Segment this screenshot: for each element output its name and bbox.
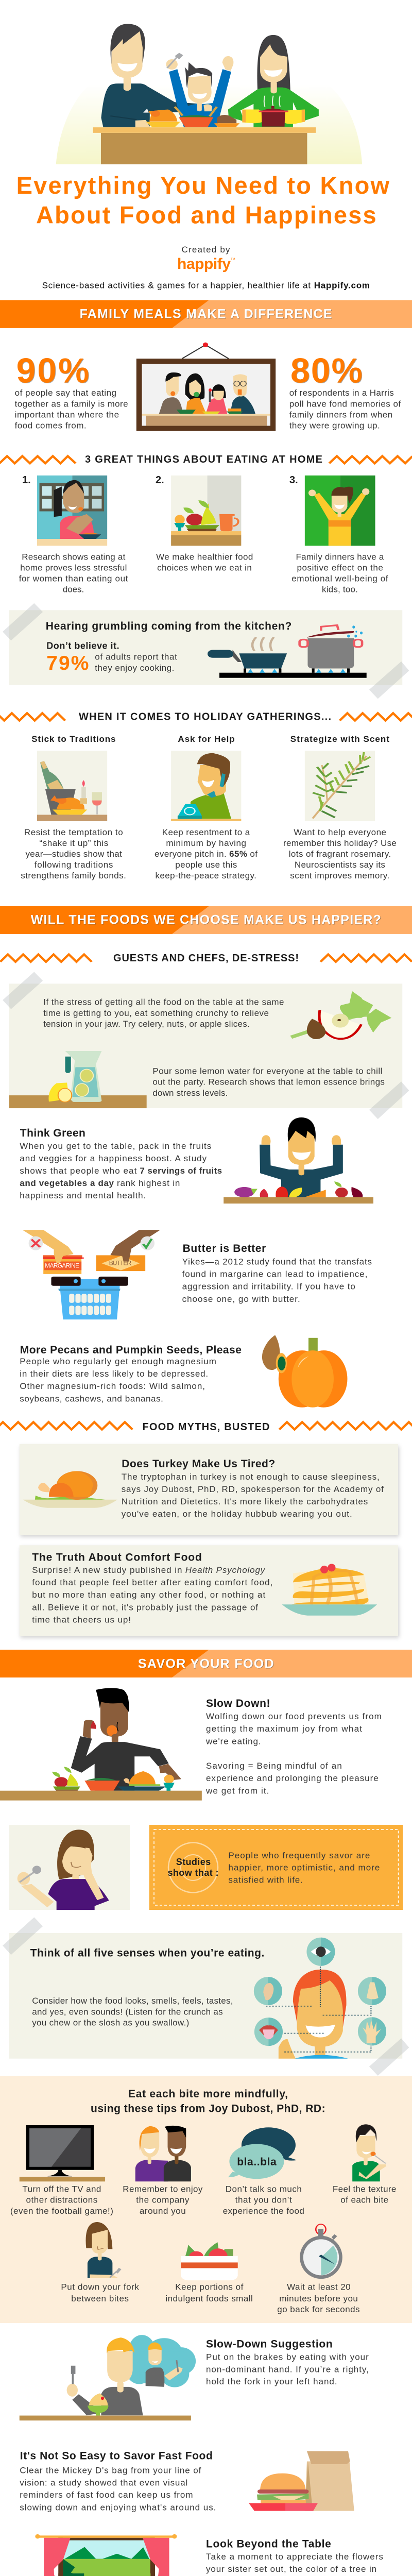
food on table [143,107,239,127]
column: stick to traditions: year—studies show that [26,849,122,859]
tip: feel the texture: of each bite [340,2195,388,2205]
tip: enjoy company: around you [140,2206,186,2216]
illustration: choosing butter over margarine [22,1230,160,1319]
icon: rosemary [305,751,375,821]
column: strategize with scent: Want to help everyone [294,827,386,837]
tagline: Happify.com [314,280,370,291]
block: fast food [20,2450,216,2512]
panel: studies show that: People who frequently savor are [228,1851,370,1860]
hero illustration: family at table [56,24,362,164]
heading: 3 great things [0,454,412,465]
block: fast food: vision: a study showed that even visual [20,2478,187,2487]
block: butter is better: Butter is Better [183,1243,266,1255]
heading: 3 great things: 3 GREAT THINGS ABOUT EATING AT HOME [85,454,322,465]
panel: de-stress tips: If the stress of getting all the food on the table at the same [43,997,284,1007]
panel: mindful eating tips [0,2076,412,2323]
heading: food myths [0,1421,412,1433]
block: think green: shows that people who eat [20,1166,137,1176]
column: strategize with scent [283,734,397,880]
stat: 80%: they were growing up. [289,420,380,430]
column: strategize with scent: scent improves memory. [290,871,389,880]
callout: grumbling in the kitchen: Hearing grumbling coming from the kitchen? [46,620,291,632]
block: look beyond the table [206,2538,383,2576]
heading: food myths: FOOD MYTHS, BUSTED [142,1421,270,1433]
block: fast food: Clear the Mickey D's bag from your line of [20,2465,201,2475]
card: truth about comfort food: time that cheers us up! [32,1615,131,1624]
icon: roast turkey [23,1471,117,1508]
card: truth about comfort food: The Truth About Comfort Food [32,1551,202,1563]
icon: celery, apple and nut [291,991,391,1039]
tip: wait 20 minutes: Wait at least 20 [287,2282,351,2292]
panel: de-stress tips: tension in your jaw. Try celery, nuts, or apple slices. [43,1019,250,1029]
block: pecans and pumpkin seeds: soybeans, cashews, and bananas. [20,1394,163,1403]
item captions: We make healthier food [156,552,253,562]
heading: guests and chefs [1,953,412,964]
illustration: man with fruits and vegetables [224,1117,373,1204]
item captions: emotional well-being of [291,574,388,584]
column: stick to traditions [21,734,126,880]
item 3: number and picture of happy girl [289,474,375,546]
illustration: man eating at table [0,1688,202,1801]
icon: pancake stack [282,1564,377,1616]
item 3: number and picture of happy girl: 3. [289,474,298,486]
boy with fork [166,53,233,127]
panel: mindful eating tips: using these tips from Joy Dubost, PhD, RD: [91,2103,325,2114]
tip: wait 20 minutes [277,2224,359,2314]
block: slow down: Savoring = Being mindful of an [206,1761,342,1771]
tip: put down fork: between bites [71,2294,129,2303]
framed family picture [136,343,276,431]
item 1: number and picture of woman eating [22,474,107,546]
illustration: window sill with vase and fruit [44,2573,169,2576]
block: think green: rank highest in [117,1178,180,1188]
block: think green: 7 servings of fruits [140,1166,222,1176]
column: ask for help: Ask for Help [178,734,235,744]
tip: put down fork [61,2222,139,2303]
stat: 80% [289,351,401,430]
title: Everything You Need to Know [16,172,390,199]
item captions: Research shows eating at [22,552,126,562]
card: truth about comfort food: all. Believe it or not, it's probably just the passage of [32,1602,258,1612]
panel: de-stress tips: time is getting to you, eat something crunchy to relieve [43,1008,269,1018]
tip: don't talk so much: Don’t talk so much [226,2184,302,2194]
illustration: choosing butter over margarine: MARGARINE [45,1262,79,1269]
block: think green: When you get to the table, pack in the fruits [20,1141,211,1151]
column: ask for help [154,734,258,880]
tip: turn off tv [10,2125,113,2216]
card: does turkey make us tired [20,1444,398,1535]
heading: holiday gatherings: WHEN IT COMES TO HOLIDAY GATHERINGS... [79,711,331,722]
block: slow down: experience and prolonging the pleasure [206,1773,379,1783]
panel: studies show that: happier, more optimistic, and more [228,1863,380,1873]
illustration: pumpkin and pecan [262,1335,347,1408]
block: slow down: getting the maximum joy from what [206,1724,362,1734]
block: slow-down suggestion: non-dominant hand. If you’re a righty, [206,2364,369,2374]
block: slow-down suggestion: Put on the brakes by eating with your [206,2352,369,2362]
card: does turkey make us tired: Does Turkey Make Us Tired? [122,1458,275,1470]
illustration: slow-down suggestion man [20,2335,196,2420]
icon: woman on the phone [171,751,241,821]
icon: pan and pot on stove [208,625,367,678]
column: strategize with scent: Neuroscientists say its [295,860,385,870]
tip: turn off tv: Turn off the TV and [22,2184,101,2194]
item captions: does. [63,585,84,595]
panel: five senses: you chew or the slosh as you swallow.) [32,2018,189,2027]
item captions: positive effect on the [297,563,383,573]
created by: Created by [181,245,230,255]
tip: keep portions small: Keep portions of [175,2282,244,2292]
woman with pot [228,35,319,127]
block: think green: happiness and mental health. [20,1191,146,1200]
section banner: savor your food: SAVOR YOUR FOOD [138,1657,274,1671]
column: ask for help: minimum by having [166,838,246,848]
tip: don't talk so much: experience the food [223,2206,304,2216]
tip: don't talk so much: bla..bla [237,2156,277,2168]
tip: feel the texture [333,2124,396,2205]
section banner: will the foods make us happier [0,906,412,934]
heading: guests and chefs: GUESTS AND CHEFS, DE-STRESS! [113,953,299,964]
block: fast food: slowing down and enjoying what's around us. [20,2503,216,2512]
item 1: number and picture of woman eating: 1. [22,474,31,486]
item captions [19,552,388,595]
block: slow down: we're eating. [205,1736,261,1746]
column: ask for help: everyone pitch in. 65% of [154,849,258,859]
stat: 80%: poll have fond memories of [289,399,401,409]
created by [177,245,235,273]
callout: grumbling in the kitchen: they enjoy cooking. [95,663,174,673]
callout: grumbling in the kitchen: of adults report that [95,652,177,662]
icon: champagne, turkey, candle [37,751,107,821]
tip: enjoy company [123,2126,203,2216]
card: truth about comfort food: Health Psychology [185,1565,266,1575]
item captions: home proves less stressful [20,563,127,573]
panel: de-stress tips: down stress levels. [152,1088,228,1098]
block: butter is better [182,1243,372,1304]
panel: five senses [3,1917,409,2076]
panel: de-stress tips [3,972,409,1119]
illustration: burger and paper bag [249,2451,354,2511]
item captions: kids, too. [322,585,358,595]
block: slow-down suggestion: Slow-Down Suggestion [206,2338,333,2350]
tip: enjoy company: the company [136,2195,190,2205]
section banner: family meals [0,300,412,328]
block: pecans and pumpkin seeds: People who regularly get enough magnesium [20,1357,216,1366]
block: pecans and pumpkin seeds [20,1344,242,1403]
stat: 90% [15,351,128,430]
tip: turn off tv: (even the football game!) [10,2206,113,2216]
column: ask for help: people use this [175,860,237,870]
item captions: Family dinners have a [296,552,384,562]
tip: keep portions small [165,2242,253,2303]
block: look beyond the table: Look Beyond the Table [206,2538,331,2550]
block: slow down: Slow Down! [206,1698,270,1709]
table [93,127,316,164]
column: strategize with scent: Strategize with Scent [290,734,389,744]
panel: de-stress tips: out the party. Research shows that lemon essence brings [152,1077,385,1087]
block: fast food: reminders of fast food can keep us from [20,2490,193,2500]
section banner: family meals: FAMILY MEALS MAKE A DIFFERENCE [80,307,332,321]
block: slow down: we get from it. [205,1786,269,1795]
title: About Food and Happiness [36,201,376,229]
stat: 90%: food comes from. [15,420,87,430]
panel: woman savoring [9,1825,130,1910]
card: does turkey make us tired: The tryptophan in turkey is not enough to cause sleepiness, [122,1472,380,1482]
callout: grumbling in the kitchen: Don’t believe it. [46,640,119,651]
tip: wait 20 minutes: minutes before you [279,2294,358,2303]
illustration: choosing butter over margarine: BUTTER [109,1260,131,1267]
column: stick to traditions: “shake it up” this [39,838,108,848]
block: slow-down suggestion [206,2338,369,2386]
block: think green: and veggies for a happiness boost. A study [20,1154,207,1163]
stat: 90%: of people say that eating [15,388,116,398]
block: look beyond the table: your sister set out, the color of a tree in [206,2564,376,2574]
title [16,172,390,229]
column: strategize with scent: lots of fragrant rosemary. [289,849,391,859]
panel: studies show that [149,1825,403,1910]
block: pecans and pumpkin seeds: in their diets are less likely to be depressed. [20,1369,208,1379]
callout: grumbling in the kitchen: 79% [46,652,89,674]
icon: pitcher of lemon water [9,1051,147,1108]
block: slow down [205,1698,382,1795]
tip: don't talk so much: that you don’t [235,2195,292,2205]
panel: de-stress tips: Pour some lemon water for everyone at the table to chill [152,1066,382,1076]
card: truth about comfort food: but no more than eating any other food, or nothing at [32,1590,265,1600]
tip: keep portions small: indulgent foods small [165,2294,253,2303]
tip: enjoy company: Remember to enjoy [123,2184,203,2194]
block: pecans and pumpkin seeds: Other magnesium-rich foods: Wild salmon, [20,1381,205,1391]
heading: holiday gatherings [0,711,412,722]
panel: studies show that: satisfied with life. [228,1875,303,1885]
card: does turkey make us tired: says Joy Dubost, PhD, RD, spokesperson for the Academy of [122,1484,384,1494]
block: look beyond the table: Take a moment to appreciate the flowers [206,2552,383,2562]
illustration: window with garden view [35,2534,177,2576]
tip: put down fork: Put down your fork [61,2282,139,2292]
item 2: number and picture of fruit and tea [156,474,241,546]
stat: 90%: 90% [16,351,89,391]
column: strategize with scent: remember this holiday? Use [283,838,397,848]
column: stick to traditions: strengthens family bonds. [21,871,126,880]
stat: 80%: 80% [290,351,363,391]
tip: turn off tv: other distractions [26,2195,97,2205]
panel: mindful eating tips: Eat each bite more mindfully, [128,2088,288,2100]
created by: TM [231,258,235,261]
block: slow down: Wolfing down our food prevents us from [206,1711,382,1721]
callout: grumbling in the kitchen [3,603,409,699]
column: ask for help: keep-the-peace strategy. [156,871,256,880]
tip: feel the texture: Feel the texture [333,2184,396,2194]
stat: 90%: together as a family is more [15,399,128,409]
item 2: number and picture of fruit and tea: 2. [156,474,164,486]
column: stick to traditions: following traditions [35,860,113,870]
block: butter is better: Yikes—a 2012 study found that the transfats [182,1257,372,1267]
stat: 80%: family dinners from when [289,410,392,419]
block: butter is better: aggression and irritability. If you have to [182,1282,355,1291]
item captions: for women than eating out [19,574,128,584]
column: stick to traditions: Resist the temptation to [24,827,123,837]
section banner: will the foods make us happier: WILL THE FOODS WE CHOOSE MAKE US HAPPIER? [31,913,381,927]
card: does turkey make us tired: Nutrition and Dietetics. It's more likely the carbohydrates [122,1497,368,1506]
stat: 90%: important than where the [15,410,119,419]
tagline: Science-based activities & games for a happier, healthier life at [42,280,311,291]
block: think green: Think Green [20,1127,85,1139]
panel: studies show that: show that : [168,1868,218,1878]
panel: five senses: and yes, even sounds! (Listen for the crunch as [32,2007,223,2016]
panel: five senses: Think of all five senses when you’re eating. [30,1947,264,1959]
stat: 80%: of respondents in a Harris [289,388,394,398]
tip: don't talk so much [223,2127,304,2216]
block: pecans and pumpkin seeds: More Pecans and Pumpkin Seeds, Please [20,1344,242,1356]
tip: wait 20 minutes: go back for seconds [277,2304,359,2314]
section banner: savor your food [0,1650,412,1677]
card: truth about comfort food [20,1545,398,1636]
block: think green [20,1127,222,1200]
column: ask for help: Keep resentment to a [162,827,250,837]
card: truth about comfort food: Surprise! A new study published in [32,1565,182,1575]
block: butter is better: found in margarine can lead to impatience, [182,1269,367,1279]
block: fast food: It's Not So Easy to Savor Fast Food [20,2450,213,2462]
card: truth about comfort food: found that people feel better after eating comfort food, [32,1578,272,1587]
created by: happify [177,256,231,273]
item captions: choices when we eat in [157,563,252,573]
block: slow-down suggestion: hold the fork in your left hand. [206,2377,337,2386]
block: think green: and vegetables a day [20,1178,114,1188]
icon: five senses head diagram [254,1938,386,2059]
man [101,24,205,127]
panel: five senses: Consider how the food looks, smells, feels, tastes, [32,1996,233,2006]
card: does turkey make us tired: you've eaten, or the holiday hubbub wearing you out. [122,1509,352,1519]
panel: studies show that: Studies [176,1857,211,1867]
block: butter is better: choose one, go with butter. [182,1294,300,1304]
column: stick to traditions: Stick to Traditions [31,734,116,744]
